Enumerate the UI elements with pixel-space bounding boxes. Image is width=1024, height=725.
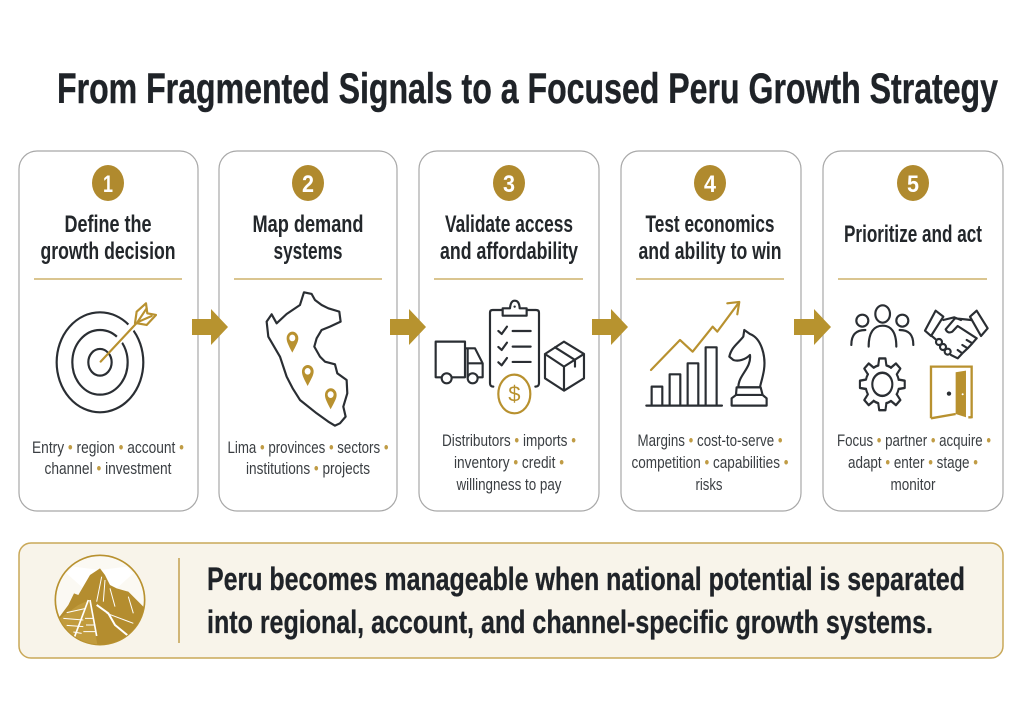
heading 3 [440,211,578,265]
badge 2 [292,165,324,201]
body text 2: Lima • provinces • sectors • [228,438,389,457]
arrow 3 to 4 [592,309,628,345]
icon: rising bar chart and chess knight [646,302,767,406]
badge 4 [694,165,726,201]
icon: Peru map with pins [267,292,347,426]
body text 5: adapt • enter • stage • [848,453,978,472]
heading 2: Map demand [252,211,364,238]
body text 1: channel • investment [44,459,172,478]
body text 3: inventory • credit • [454,453,564,472]
body text 1: Entry • region • account • [32,438,184,457]
badge 4: 4 [704,171,717,198]
heading 1 [40,211,176,265]
body text 5 [837,431,991,494]
arrow 4 to 5 [794,309,831,345]
icon: Machu Picchu mountain [50,555,147,650]
heading 1: Define the [64,211,152,238]
panel: step 3 validate access and affordability [419,151,599,511]
body text 4: Margins • cost-to-serve • [638,431,783,450]
body text 3: willingness to pay [456,475,562,494]
body text 4 [632,431,789,494]
badge 2: 2 [302,171,314,198]
icon: truck, checklist, coin and box [436,301,584,413]
heading 1: growth decision [40,238,176,265]
heading 3: and affordability [440,238,578,265]
body text 4: competition • capabilities • [632,453,789,472]
heading 4: Test economics [646,211,774,238]
body text 5: monitor [890,475,936,494]
icon: handshake [925,311,988,358]
panel: step 1 define the growth decision [19,151,198,511]
badge 5: 5 [907,171,919,198]
icon: team and gear [851,305,972,418]
body text 2: institutions • projects [246,459,370,478]
heading 4: and ability to win [638,238,782,265]
icon: truck, checklist, coin and box: $ [508,382,520,407]
arrow 2 to 3 [390,309,426,345]
badge 1: 1 [103,171,113,198]
icon: target with arrow [57,303,156,412]
heading 4 [638,211,782,265]
callout: conclusion band [19,543,1003,658]
badge 1 [92,165,124,201]
panel: step 5 prioritize and act [823,151,1003,511]
divider [178,558,180,643]
heading 3: Validate access [445,211,573,238]
panel: step 4 test economics and ability to win [621,151,801,511]
body text 2 [228,438,389,478]
badge 5 [897,165,929,201]
body text 5: Focus • partner • acquire • [837,431,991,450]
heading 2 [252,211,364,265]
body text 3 [442,431,576,494]
body text 1 [32,438,184,478]
panel: step 2 map demand systems [219,151,397,511]
arrow 1 to 2 [192,309,228,345]
badge 3: 3 [503,171,515,198]
callout text [207,561,965,640]
heading 2: systems [274,238,342,265]
body text 3: Distributors • imports • [442,431,576,450]
body text 4: risks [696,475,722,494]
badge 3 [493,165,525,201]
